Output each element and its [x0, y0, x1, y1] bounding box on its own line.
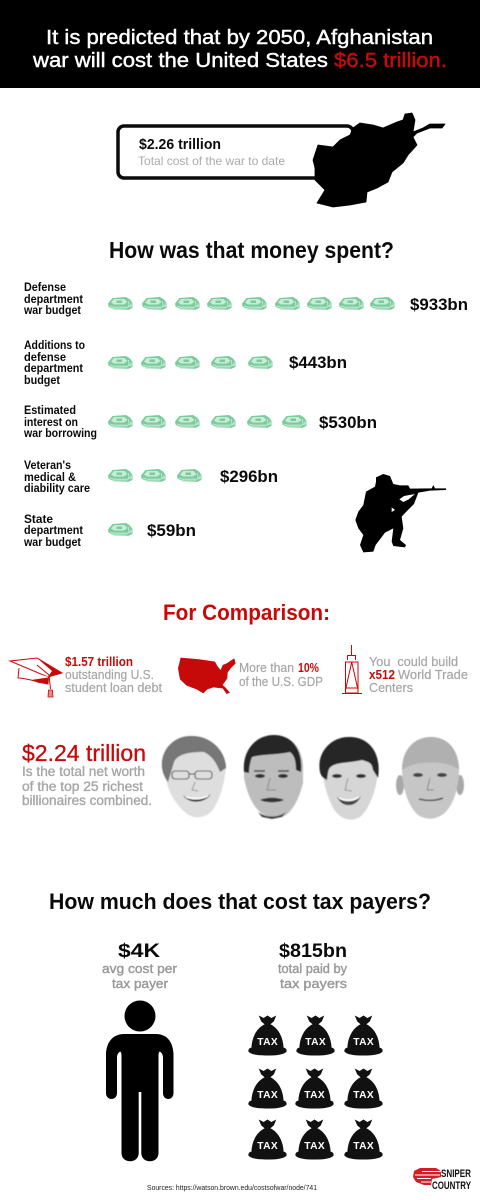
comparison: share of GDP: of the U.S. GDP	[239, 674, 323, 689]
row: estimated interest on war borrowing: interest on	[24, 417, 78, 429]
row: state department war budget: State	[24, 514, 53, 526]
comparison: world trade centers: Centers	[369, 680, 413, 695]
portrait: face 2	[244, 735, 303, 819]
sources: Sources: https://watson.brown.edu/costsofwar/node/741	[147, 1185, 317, 1192]
row: estimated interest on war borrowing: $530bn	[319, 413, 377, 432]
icon: person	[106, 1000, 174, 1161]
row: estimated interest on war borrowing: war borrowing	[23, 428, 97, 440]
billionaires net worth text: Is the total net worth	[22, 764, 145, 779]
stat: total paid by tax payers	[278, 941, 348, 991]
heading: for comparison: For Comparison:	[163, 600, 330, 625]
portrait: face 3	[319, 737, 379, 820]
row: defense department war budget: department	[24, 294, 83, 306]
total cost callout card	[118, 126, 353, 178]
row: state department war budget: $59bn	[147, 521, 196, 540]
comparison: world trade centers: x512	[369, 667, 395, 682]
title: It is predicted that by 2050, Afghanistan	[46, 26, 433, 49]
logo: Sniper Country	[413, 1168, 471, 1192]
portrait: face 1 with glasses	[162, 736, 226, 817]
row: veteran's medical and disability care: Veteran's	[24, 460, 71, 472]
icon: USA map	[178, 658, 236, 694]
icon: kneeling soldier	[355, 474, 446, 552]
row: state department war budget	[23, 514, 196, 549]
tax money bags	[248, 1016, 383, 1159]
row: defense department war budget: war budget	[23, 305, 81, 317]
comparison: student loan debt: $1.57 trillion	[65, 654, 133, 669]
billionaires net worth text: $2.24 trillion	[22, 740, 146, 766]
row: additions to defense department budget: defense	[24, 352, 66, 364]
title: $6.5 trillion.	[334, 49, 447, 72]
stat: cost per tax payer: tax payer	[112, 976, 169, 991]
comparison: world trade centers: You could build	[369, 654, 458, 669]
icon: World Trade Center tower	[342, 645, 362, 694]
title	[32, 26, 447, 72]
comparison: world trade centers: World Trade	[398, 667, 468, 682]
stat: total paid by tax payers: tax payers	[280, 976, 348, 991]
stat: cost per tax payer: $4K	[118, 941, 160, 962]
row: veteran's medical and disability care: medical &	[24, 472, 76, 484]
row: additions to defense department budget: Additions to	[24, 340, 85, 352]
row: state department war budget: department	[24, 525, 83, 537]
icon: Afghanistan map	[313, 113, 445, 207]
heading: how was that money spent: How was that money spent?	[109, 237, 394, 263]
comparison: student loan debt: student loan debt	[65, 680, 162, 695]
row: estimated interest on war borrowing	[23, 405, 377, 440]
comparison: share of GDP: 10%	[298, 660, 319, 675]
row: veteran's medical and disability care: diability care	[24, 483, 90, 495]
billionaires net worth text	[22, 740, 152, 808]
row: additions to defense department budget: department	[24, 363, 83, 375]
heading: how much does that cost tax payers: How much does that cost tax payers?	[49, 889, 431, 914]
row: veteran's medical and disability care: $296bn	[220, 467, 278, 486]
row: defense department war budget	[23, 282, 468, 317]
row: state department war budget: war budget	[23, 537, 81, 549]
stat: total paid by tax payers: total paid by	[278, 961, 347, 976]
icon: graduation cap	[10, 658, 62, 697]
stat: cost per tax payer: avg cost per	[102, 961, 178, 976]
comparison: student loan debt: outstanding U.S.	[65, 667, 154, 682]
billionaires net worth text: of the top 25 richest	[22, 779, 143, 794]
comparison: share of GDP: More than	[239, 660, 294, 675]
comparison: share of GDP	[178, 658, 323, 694]
row: additions to defense department budget: $443bn	[289, 353, 347, 372]
stat: total paid by tax payers: $815bn	[279, 941, 347, 962]
row: additions to defense department budget	[24, 340, 347, 387]
portrait: face 4	[396, 737, 464, 819]
row: veteran's medical and disability care	[24, 460, 278, 495]
comparison: world trade centers	[342, 645, 468, 695]
billionaires net worth text: billionaires combined.	[22, 793, 152, 808]
row: defense department war budget: Defense	[24, 282, 66, 294]
header banner	[0, 0, 480, 88]
total cost callout card: $2.26 trillion	[139, 137, 221, 153]
title: war will cost the United States	[32, 49, 328, 72]
row: defense department war budget: $933bn	[410, 295, 468, 314]
stat: cost per tax payer	[102, 941, 178, 991]
row: additions to defense department budget: budget	[24, 375, 60, 387]
comparison: student loan debt	[10, 654, 162, 697]
row: estimated interest on war borrowing: Estimated	[24, 405, 76, 417]
total cost callout card: Total cost of the war to date	[138, 154, 285, 168]
